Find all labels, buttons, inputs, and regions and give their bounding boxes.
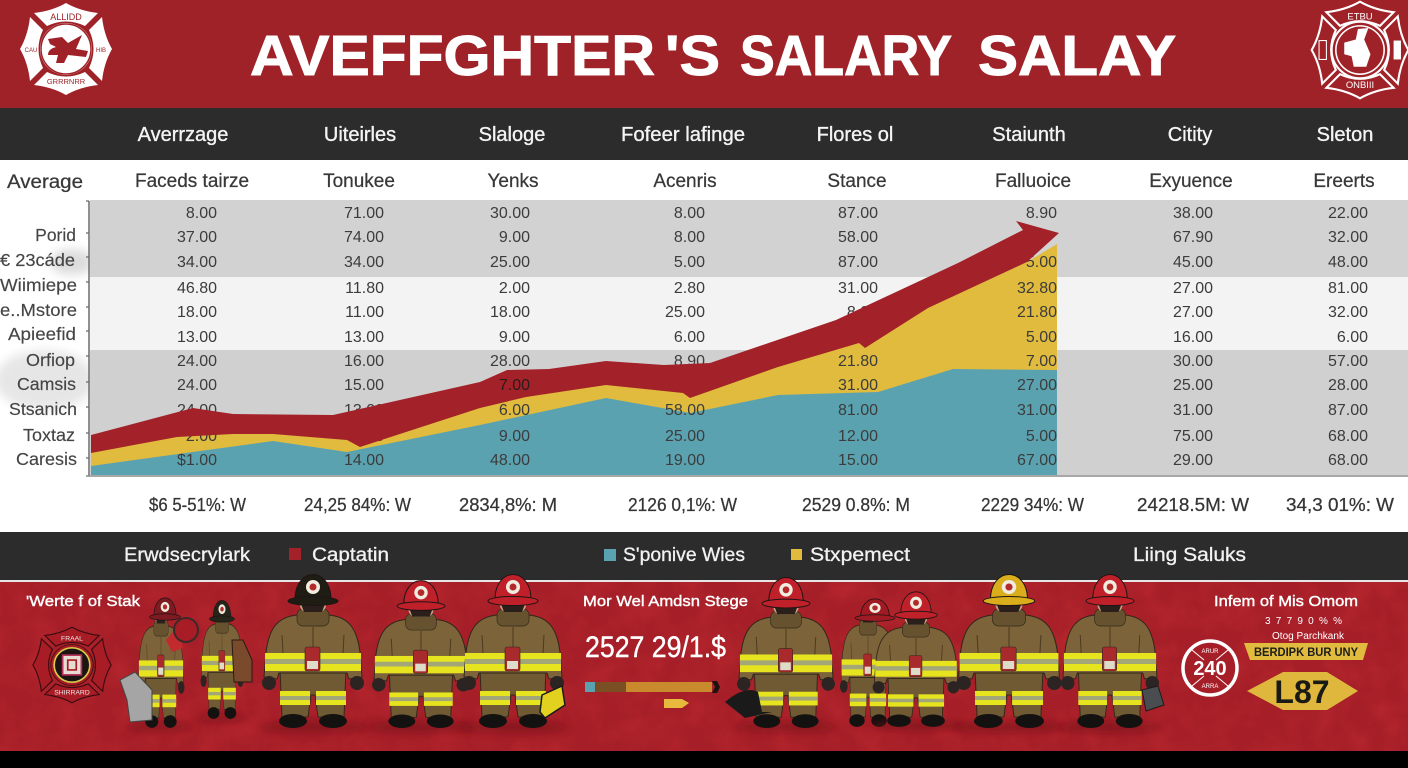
column 4 values: 5.00 [674,254,705,271]
column 5 values: 81.00 [838,402,878,419]
icon: left red badge: SHIRRARD [54,690,90,696]
column 8 values [1328,205,1368,469]
legend bar: Stxpemect [810,545,911,566]
yellow banner: BERDIPK BUR UNY [1254,647,1358,659]
row labels [0,225,77,469]
column 3 values [490,205,530,469]
row labels: Wiimiepe [0,275,77,295]
title: SALAY [978,24,1176,88]
left caption: 'Werte f of Stak [26,593,141,610]
column 7 values [1173,205,1213,469]
column 7 values: 25.00 [1173,377,1213,394]
column header bar [0,108,1408,160]
column 8 values: 68.00 [1328,452,1368,469]
icon: left red badge [33,627,111,703]
icon: round stamp [1183,641,1237,695]
column 7 values: 30.00 [1173,353,1213,370]
column 6 values: 5.00 [1026,428,1057,445]
icon: grey bag right [1142,686,1164,711]
column 5 values: 15.00 [838,452,878,469]
column 5 values: 31.00 [838,377,878,394]
yellow value hexagon: L87 [1274,674,1330,710]
title: SALARY [740,24,952,88]
column 7 values: 16.00 [1173,329,1213,346]
column 8 values: 57.00 [1328,353,1368,370]
column 6 values: 5.00 [1026,329,1057,346]
center figure: 2527 29/1.$ [585,631,726,664]
column 5 values: 8.00 [847,304,878,321]
firefighter 1 [126,598,194,732]
firefighter 8 [869,592,963,731]
column 5 values: 12.00 [838,428,878,445]
totals row: 34,3 01%: W [1286,495,1394,515]
row labels: Stsanich [9,399,77,419]
icon: left fire department emblem: GRRRNRR [47,77,86,86]
column 1 values: 24.00 [177,377,217,394]
firefighter 4 [368,581,474,733]
column 3 values: 30.00 [490,205,530,222]
icon: right fire department emblem: ONBIII [1346,80,1374,91]
column 2 values: 8.00 [353,428,384,445]
legend bar: S'ponive Wies [623,545,745,566]
area: yellow series [91,244,1057,475]
table subheader row: Exyuence [1149,171,1233,192]
column 4 values: 8.90 [674,353,705,370]
column 6 values: 5.00 [1026,254,1057,271]
column 6 values: 31.00 [1017,402,1057,419]
bottom banner [0,574,1408,768]
small numbers: 3 7 7 9 0 % % [1265,616,1342,627]
column header bar: Staiunth [992,124,1066,146]
column 3 values: 25.00 [490,254,530,271]
column header bar: Flores ol [817,124,893,146]
column 1 values: 46.80 [177,280,217,297]
column 2 values: 34.00 [344,254,384,271]
column 7 values: 27.00 [1173,280,1213,297]
row labels: Toxtaz [23,425,75,445]
progress bar [585,681,720,693]
row labels: Caresis [16,449,77,469]
column header bar: Slaloge [479,124,545,146]
table subheader row [7,171,1375,193]
chart axes [86,201,1408,476]
column 1 values: 37.00 [177,229,217,246]
column 4 values [665,205,705,469]
column 1 values: 18.00 [177,304,217,321]
icon: right fire department emblem [1312,2,1408,98]
firefighter 2 [196,600,248,722]
column 6 values: 7.00 [1026,353,1057,370]
title [250,24,1176,88]
column 2 values: 15.00 [344,377,384,394]
column 5 values: 21.80 [838,353,878,370]
column 1 values: 24.00 [177,353,217,370]
column 3 values: 6.00 [499,402,530,419]
column 1 values [177,205,217,469]
column 2 values: 71.00 [344,205,384,222]
row labels: e..Mstore [0,300,77,320]
row labels: € 23cáde [0,250,75,270]
column 1 values: 24.00 [177,402,217,419]
column 3 values: 9.00 [499,229,530,246]
header banner [0,0,1408,108]
column 8 values: 22.00 [1328,205,1368,222]
column 4 values: 6.00 [674,329,705,346]
icon: side pack [232,640,252,682]
column header bar: Averrzage [138,124,228,146]
legend bar: Captatin [312,545,389,566]
icon: left fire department emblem: CAU [25,48,37,54]
totals row: 24,25 84%: W [304,495,411,515]
column 3 values: 28.00 [490,353,530,370]
table subheader row: Ereerts [1313,171,1375,192]
table subheader row: Faceds tairze [135,171,249,192]
right caption: Infem of Mis Omom [1214,593,1358,610]
table subheader row: Acenris [653,171,717,192]
firefighter 9 [952,574,1066,733]
yellow value hexagon [1247,672,1358,710]
firefighter 3 [258,574,368,733]
row labels: Porid [35,225,76,245]
icon: left fire department emblem: ALLIDD [50,12,82,22]
column 4 values: 19.00 [665,452,705,469]
table subheader row: Falluoice [995,171,1071,192]
table subheader row: Yenks [487,171,539,192]
small caption: Otog Parchkank [1272,631,1345,642]
icon: round stamp: 240 [1193,658,1227,680]
column 7 values: 45.00 [1173,254,1213,271]
table subheader row: Average [7,172,83,193]
column 4 values: 2.80 [674,280,705,297]
icon: black helmet [725,690,772,718]
totals row: $6 5-51%: W [149,495,246,515]
column 7 values: 67.90 [1173,229,1213,246]
column 8 values: 48.00 [1328,254,1368,271]
firefighter 10 [1057,574,1163,733]
value on red arrow: 7.00 [499,377,530,394]
table values [177,205,1368,469]
arrow: small yellow [664,699,689,708]
column 8 values: 6.00 [1337,329,1368,346]
column 5 values: 31.00 [838,280,878,297]
column 2 values [344,205,384,469]
column header bar: Uiteirles [324,124,396,146]
column 8 values: 28.00 [1328,377,1368,394]
column 4 values: 25.00 [665,428,705,445]
title: AVEFFGHTER [250,24,655,88]
column 4 values: 25.00 [665,304,705,321]
column 4 values: 8.00 [674,229,705,246]
column 6 values: 27.00 [1017,377,1057,394]
column 8 values: 32.00 [1328,229,1368,246]
icon: left fire department emblem: HIB [96,48,106,54]
column 8 values: 87.00 [1328,402,1368,419]
icon: grey bag [120,672,152,722]
icon: right fire department emblem: ETBU [1347,12,1373,23]
column 1 values: 2.00 [186,428,217,445]
totals row: 2529 0.8%: M [802,495,910,515]
icon: round stamp: ARUR [1201,649,1219,655]
firefighter 6 [733,578,839,733]
column 5 values [838,205,878,469]
table subheader row: Stance [827,171,887,192]
table subheader row: Tonukee [323,171,395,192]
column 2 values: 14.00 [344,452,384,469]
icon: red hose coil [166,618,198,652]
column 3 values: 9.00 [499,428,530,445]
column 1 values: 8.00 [186,205,217,222]
icon: left red badge: FRAAL [61,635,83,642]
column 2 values: 74.00 [344,229,384,246]
arrow: red rising trend [91,221,1059,453]
firefighter 7 [840,599,896,727]
column 7 values: 38.00 [1173,205,1213,222]
totals row: 24218.5M: W [1137,495,1249,515]
column 7 values: 29.00 [1173,452,1213,469]
column 5 values: 87.00 [838,205,878,222]
column 2 values: 11.80 [345,280,384,297]
column 1 values: 13.00 [177,329,217,346]
column 8 values: 68.00 [1328,428,1368,445]
chart panel [0,200,1408,476]
area: teal series [91,369,1057,475]
column 1 values: 34.00 [177,254,217,271]
firefighter 5 [458,574,568,733]
column header bar: Sleton [1317,124,1373,146]
legend bar: Erwdsecrylark [124,545,251,566]
legend bar [0,532,1408,580]
column 7 values: 27.00 [1173,304,1213,321]
icon: yellow bag [540,686,565,718]
legend bar: Liing Saluks [1133,545,1246,566]
column 2 values: 11.00 [345,304,384,321]
column 6 values [1017,205,1057,469]
title: 'S [665,24,720,88]
totals row: 2834,8%: M [459,495,557,515]
icon: left fire department emblem [20,3,112,95]
row labels: Camsis [17,374,76,394]
totals row [149,495,1394,515]
totals row: 2126 0,1%: W [628,495,737,515]
column header bar: Fofeer lafinge [621,124,745,146]
column 6 values: 8.90 [1026,205,1057,222]
column 5 values: 58.00 [838,229,878,246]
yellow banner [1244,643,1368,660]
column 1 values: $1.00 [177,452,217,469]
column 2 values: 13.00 [344,402,384,419]
column 6 values: 21.80 [1017,304,1057,321]
column 7 values: 31.00 [1173,402,1213,419]
column 2 values: 13.00 [344,329,384,346]
column header bar: Citity [1168,124,1212,146]
column 2 values: 16.00 [344,353,384,370]
column 8 values: 81.00 [1328,280,1368,297]
column 3 values: 18.00 [490,304,530,321]
row labels: Apieefid [8,324,76,344]
column 3 values: 9.00 [499,329,530,346]
column 7 values: 75.00 [1173,428,1213,445]
column 4 values: 8.00 [674,205,705,222]
center caption: Mor Wel Amdsn Stege [583,593,748,610]
column 3 values: 2.00 [499,280,530,297]
column 3 values: 48.00 [490,452,530,469]
totals row: 2229 34%: W [981,495,1084,515]
column 8 values: 32.00 [1328,304,1368,321]
row labels: Orfiop [26,350,75,370]
icon: round stamp: ARRA [1202,684,1218,690]
column 6 values: 67.00 [1017,452,1057,469]
column 4 values: 58.00 [665,402,705,419]
column 5 values: 87.00 [838,254,878,271]
column 6 values: 32.80 [1017,280,1057,297]
